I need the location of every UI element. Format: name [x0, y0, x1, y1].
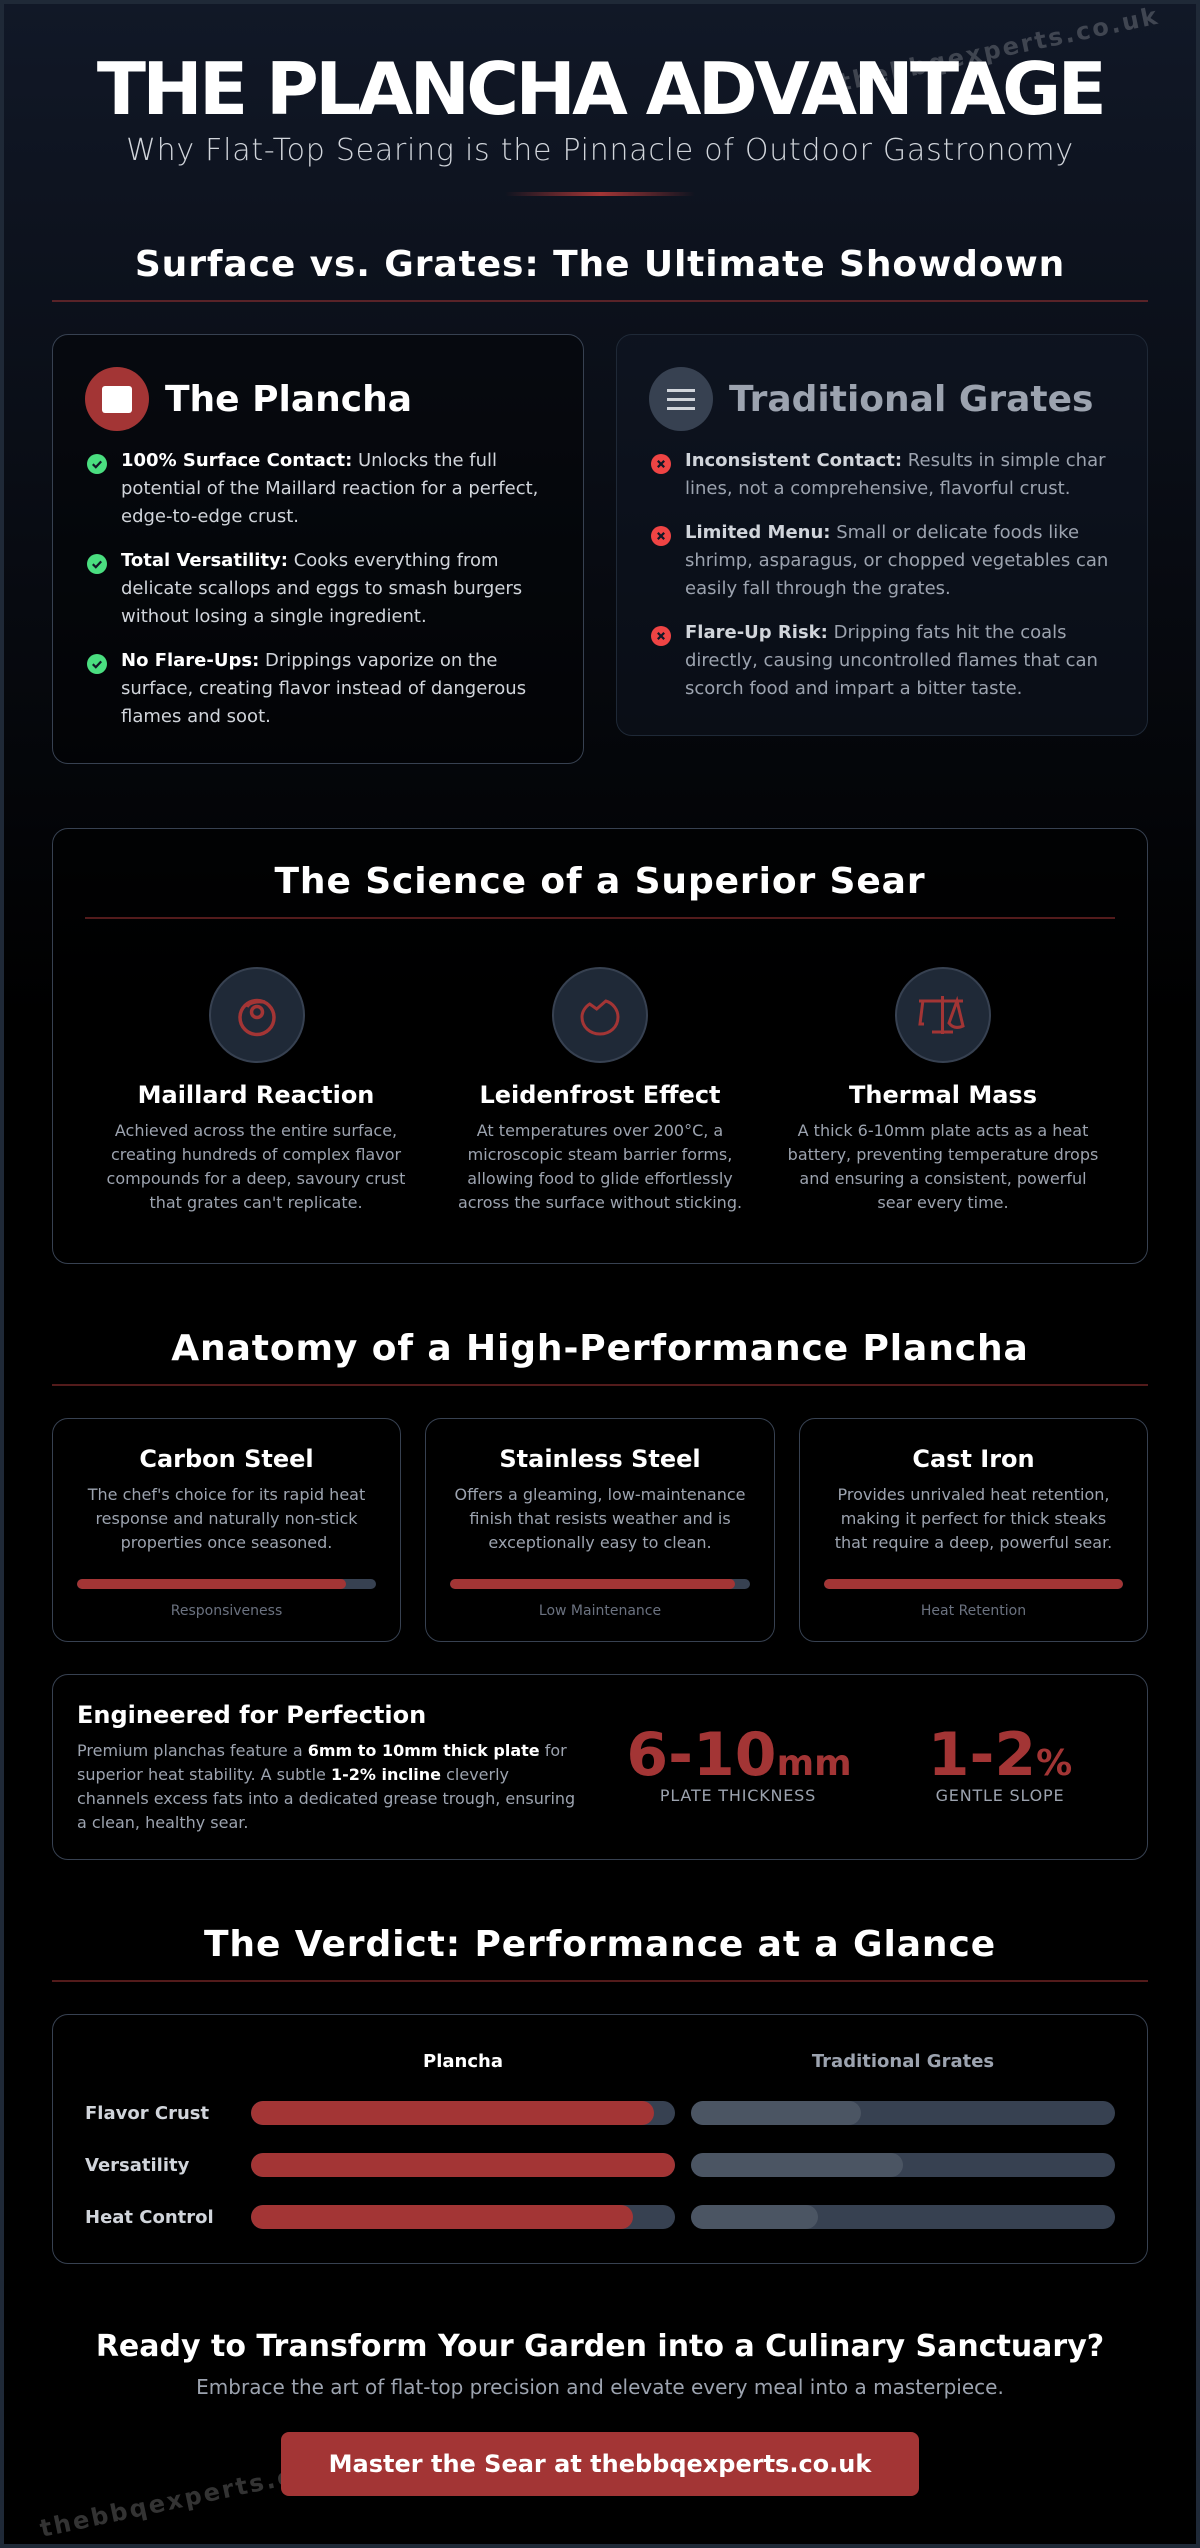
panel: cast iron: making it perfect for thick steaks [841, 1509, 1106, 1528]
panel: cast iron: Provides unrivaled heat retention, [837, 1485, 1110, 1504]
text: leidenfrost description: allowing food to glide effortlessly [467, 1169, 733, 1188]
legend: plancha: Plancha [423, 2051, 503, 2072]
benefit: surface contact: 100% Surface Contact: Unlocks the full [121, 450, 497, 471]
drawback: limited menu [651, 522, 1108, 599]
icon: plancha surface [85, 367, 149, 431]
panel: stainless steel: Offers a gleaming, low-maintenance [454, 1485, 746, 1504]
title: THE PLANCHA ADVANTAGE [97, 47, 1103, 131]
benefit: no flare-ups: No Flare-Ups: Drippings vaporize on the [121, 650, 498, 671]
panel: cast iron: Cast Iron [912, 1445, 1035, 1473]
button: Master the Sear at thebbqexperts.co.uk [329, 2450, 871, 2478]
drawback: limited menu: easily fall through the grates. [685, 578, 951, 599]
drawback: inconsistent contact: lines, not a comprehensive, flavorful crust. [685, 478, 1070, 499]
text: thermal mass description: A thick 6-10mm plate acts as a heat [798, 1121, 1088, 1140]
icon: maillard [209, 967, 305, 1063]
text: thermal mass description: sear every time. [877, 1193, 1009, 1212]
panel: carbon steel: Carbon Steel [139, 1445, 314, 1473]
button [281, 2432, 919, 2496]
panel: carbon steel: properties once seasoned. [121, 1533, 332, 1552]
label: gentle slope: GENTLE SLOPE [936, 1786, 1064, 1805]
text: leidenfrost description: across the surface without sticking. [458, 1193, 742, 1212]
row: heat control [85, 2205, 1115, 2229]
benefit: no flare-ups: flames and soot. [121, 706, 271, 727]
heading: call to action: Ready to Transform Your Garden into a Culinary Sanctuary? [96, 2329, 1104, 2364]
benefit: total versatility: Total Versatility: Cooks everything from [121, 550, 499, 571]
text: thermal mass description: and ensuring a consistent, powerful [799, 1169, 1087, 1188]
panel: traditional grates [616, 334, 1148, 736]
drawback: limited menu: shrimp, asparagus, or chopped vegetables can [685, 550, 1108, 571]
panel: cast iron [799, 1418, 1148, 1642]
text: maillard description: compounds for a deep, savoury crust [107, 1169, 405, 1188]
stat: plate thickness: 6-10mm [626, 1720, 852, 1790]
icon: leidenfrost [552, 967, 648, 1063]
row: flavor crust: Flavor Crust [85, 2103, 209, 2124]
legend: traditional grates: Traditional Grates [812, 2051, 994, 2072]
panel: cast iron: that require a deep, powerful sear. [835, 1533, 1112, 1552]
text: maillard heading: Maillard Reaction [138, 1081, 374, 1109]
benefit: total versatility: without losing a single ingredient. [121, 606, 427, 627]
panel: science [52, 828, 1148, 1264]
header accent line [505, 192, 695, 196]
panel: carbon steel: The chef's choice for its rapid heat [88, 1485, 365, 1504]
heading: anatomy: Anatomy of a High-Performance Plancha [171, 1328, 1029, 1369]
text: engineered description [77, 1741, 575, 1832]
panel: stainless steel: Low Maintenance [539, 1603, 661, 1619]
subtitle: Why Flat-Top Searing is the Pinnacle of Outdoor Gastronomy [126, 133, 1074, 168]
watermark: top right: thebbqexperts.co.uk [836, 2, 1162, 97]
panel: carbon steel [52, 1418, 401, 1642]
text: thermal mass description: battery, preventing temperature drops [788, 1145, 1098, 1164]
benefit: no flare-ups [87, 650, 526, 727]
benefit: total versatility: delicate scallops and eggs to smash burgers [121, 578, 522, 599]
benefit: surface contact [87, 450, 538, 527]
panel: stainless steel: Stainless Steel [499, 1445, 701, 1473]
benefit: total versatility [87, 550, 522, 627]
heading: engineered: Engineered for Perfection [77, 1701, 426, 1729]
drawback: inconsistent contact: Inconsistent Contact: Results in simple char [685, 450, 1106, 471]
heading: traditional grates: Traditional Grates [729, 379, 1093, 420]
drawback: flare-up risk: scorch food and impart a bitter taste. [685, 678, 1022, 699]
panel: the plancha [52, 334, 584, 764]
text: leidenfrost description [458, 1121, 742, 1212]
benefit: surface contact: potential of the Maillard reaction for a perfect, [121, 478, 538, 499]
label: plate thickness: PLATE THICKNESS [660, 1786, 816, 1805]
benefit: surface contact: edge-to-edge crust. [121, 506, 299, 527]
panel: stainless steel [425, 1418, 775, 1642]
panel: stainless steel: finish that resists weather and is [469, 1509, 731, 1528]
benefit: no flare-ups: surface, creating flavor instead of dangerous [121, 678, 526, 699]
row: versatility: Versatility [85, 2155, 189, 2176]
text: call to action: Embrace the art of flat-top precision and elevate every meal into a masterpiece. [196, 2375, 1004, 2399]
panel: carbon steel: response and naturally non-stick [95, 1509, 358, 1528]
text: maillard description: creating hundreds of complex flavor [111, 1145, 401, 1164]
drawback: flare-up risk [651, 622, 1098, 699]
text: engineered description: superior heat stability. A subtle 1-2% incline cleverly [77, 1765, 509, 1784]
icon: thermal mass [895, 967, 991, 1063]
watermark: bottom left: thebbqexperts.co.uk [37, 2448, 363, 2543]
panel: stainless steel: exceptionally easy to clean. [488, 1533, 712, 1552]
heading: the plancha: The Plancha [165, 379, 412, 420]
panel: cast iron: Heat Retention [921, 1603, 1026, 1619]
drawback: limited menu: Limited Menu: Small or delicate foods like [685, 522, 1079, 543]
panel: carbon steel: Responsiveness [171, 1603, 282, 1619]
drawback: inconsistent contact [651, 450, 1106, 499]
text: engineered description: channels excess fats into a dedicated grease trough, ensuring [77, 1789, 575, 1808]
icon: grate bars [649, 367, 713, 431]
row: flavor crust [85, 2101, 1115, 2125]
text: thermal mass description [788, 1121, 1098, 1212]
text: maillard description: Achieved across the entire surface, [115, 1121, 397, 1140]
text: leidenfrost description: At temperatures over 200°C, a [477, 1121, 723, 1140]
row: versatility [85, 2153, 1115, 2177]
row: heat control: Heat Control [85, 2207, 214, 2228]
stat: gentle slope: 1-2% [928, 1720, 1072, 1790]
text: engineered description: Premium planchas feature a 6mm to 10mm thick plate for [77, 1741, 567, 1760]
text: thermal mass heading: Thermal Mass [849, 1081, 1037, 1109]
text: maillard description: that grates can't replicate. [149, 1193, 363, 1212]
panel: performance chart [52, 2014, 1148, 2264]
text: engineered description: a clean, healthy sear. [77, 1813, 248, 1832]
heading: showdown: Surface vs. Grates: The Ultimate Showdown [135, 244, 1065, 285]
drawback: flare-up risk: Flare-Up Risk: Dripping fats hit the coals [685, 622, 1067, 643]
text: maillard description [107, 1121, 405, 1212]
heading: science: The Science of a Superior Sear [274, 861, 926, 902]
heading: verdict: The Verdict: Performance at a Glance [204, 1924, 996, 1965]
text: leidenfrost description: microscopic steam barrier forms, [468, 1145, 732, 1164]
drawback: flare-up risk: directly, causing uncontrolled flames that can [685, 650, 1098, 671]
text: leidenfrost heading: Leidenfrost Effect [479, 1081, 721, 1109]
panel: engineered for perfection [52, 1674, 1148, 1860]
